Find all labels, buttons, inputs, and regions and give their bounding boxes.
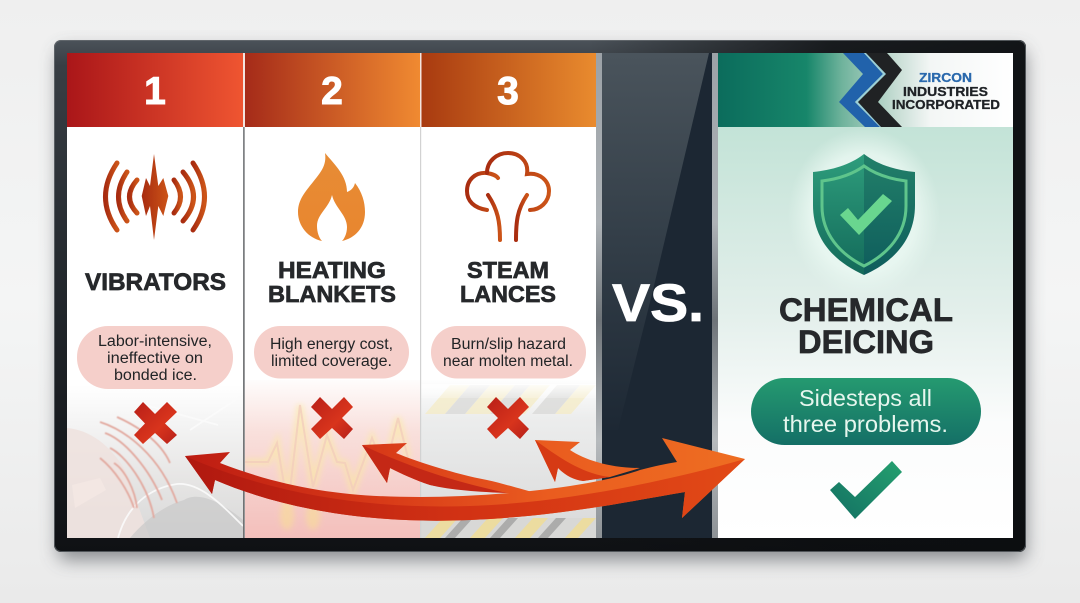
monitor frame	[54, 40, 1026, 560]
logo text: INDUSTRIES	[903, 85, 988, 99]
header 1	[67, 53, 243, 127]
callout: heating blankets: High energy cost,	[270, 336, 393, 353]
background: hazard stripes	[421, 378, 596, 538]
header 3: 3	[497, 70, 519, 113]
logo mark	[839, 53, 902, 127]
heading: steam lances: STEAM	[467, 257, 549, 283]
panel: steam lances	[421, 53, 596, 538]
icon: flame	[298, 153, 365, 241]
icon: steam cloud	[467, 153, 549, 240]
heading: chemical deicing	[779, 292, 953, 360]
panel: vs divider	[596, 53, 718, 538]
icon: vibration	[106, 154, 204, 240]
arrow: to steam lances	[535, 440, 640, 482]
callout: vibrators: ineffective on	[107, 350, 203, 367]
arrow: big double-headed	[185, 438, 745, 521]
icon: red x	[134, 402, 177, 444]
callout: sidesteps: Sidesteps all	[799, 385, 932, 411]
heading: steam lances: LANCES	[460, 281, 556, 307]
background: ice with vibration marks	[67, 412, 243, 538]
logo text: INCORPORATED	[892, 98, 1000, 112]
panel: vibrators	[67, 53, 243, 538]
background: heat pulse	[245, 375, 420, 538]
heading: vibrators: VIBRATORS	[85, 269, 226, 296]
icon: red x	[311, 397, 353, 439]
heading: heating blankets: HEATING	[278, 257, 386, 283]
heading: chemical deicing: CHEMICAL	[779, 292, 953, 328]
heading: heating blankets	[268, 257, 396, 307]
callout: vibrators: Labor-intensive,	[98, 333, 212, 350]
heading: heating blankets: BLANKETS	[268, 281, 396, 307]
panel: heating blankets	[245, 53, 420, 538]
callout: heating blankets	[254, 326, 409, 378]
heading: steam lances	[460, 257, 556, 307]
divider lines	[243, 53, 422, 538]
callout: sidesteps: three problems.	[783, 411, 948, 437]
icon: shield	[813, 154, 915, 275]
header 2: 2	[321, 70, 343, 113]
callout: vibrators: bonded ice.	[114, 367, 197, 384]
icon: red x	[487, 397, 529, 439]
panel: chemical deicing	[718, 53, 1013, 538]
header 2	[245, 53, 420, 127]
callout: sidesteps	[751, 378, 981, 445]
header 3	[421, 53, 596, 127]
logo text	[892, 71, 1000, 112]
arrow: to heating blankets	[362, 443, 540, 494]
icon: green check	[830, 461, 902, 519]
callout: steam lances: Burn/slip hazard	[451, 336, 566, 353]
text: vs: VS.	[612, 274, 704, 333]
header 1: 1	[144, 70, 166, 113]
callout: vibrators	[77, 326, 233, 389]
callout: heating blankets: limited coverage.	[271, 353, 392, 370]
callout: steam lances	[431, 326, 586, 378]
logo text: ZIRCON	[919, 71, 972, 85]
arrows	[185, 438, 745, 521]
callout: steam lances: near molten metal.	[443, 353, 573, 370]
logo header	[718, 53, 1013, 127]
heading: chemical deicing: DEICING	[798, 324, 934, 360]
